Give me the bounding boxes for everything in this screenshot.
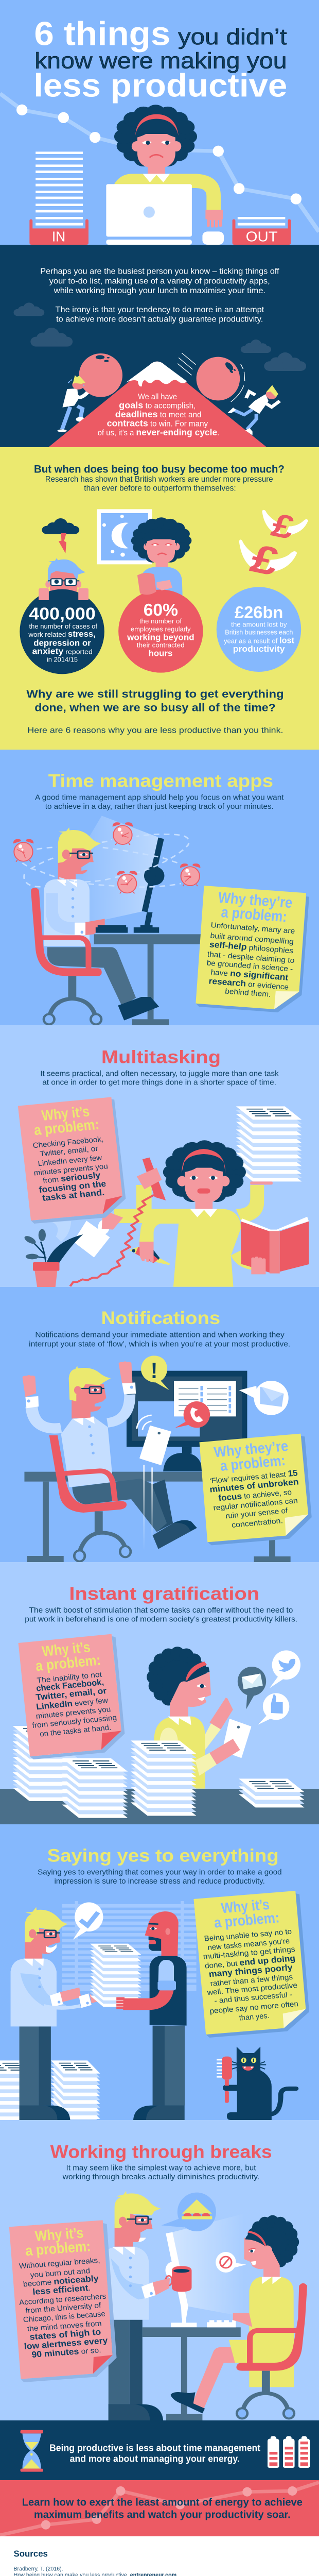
heading: why still struggling	[26, 688, 284, 714]
note: why it's a problem: than yes.	[239, 2011, 270, 2022]
illustration: mountain with text: of us, it’s a never-ending cycle.	[98, 428, 219, 438]
heading: Multitasking	[101, 1047, 221, 1067]
heading: Working through breaks	[50, 2142, 272, 2162]
intro text: Saying yes to everything that comes your way in order to make a good	[38, 1868, 282, 1876]
title: you didn’t	[178, 25, 287, 49]
note: why they're a problem: focus to achieve, so	[218, 1486, 292, 1503]
note: why it's a problem: Without regular breaks,	[19, 2256, 100, 2270]
stat: £26bn: year as a result of lost	[224, 635, 294, 645]
heading: Instant gratification	[69, 1584, 259, 1604]
illustration: woman at desk	[244, 2215, 299, 2387]
panel: working through breaks	[0, 2120, 319, 2420]
icon: coffee mug	[141, 2266, 191, 2299]
note: why they're a problem: be grounded in science -	[206, 959, 293, 973]
note: why it's a problem	[193, 1891, 309, 2038]
note: why it's a problem: focusing on the	[38, 1178, 107, 1195]
note: why it's a problem: people say no more often	[209, 1999, 299, 2015]
note: why it's a problem: you burn out and	[30, 2266, 91, 2279]
note: why they're a problem: self-help philosophies	[209, 939, 294, 955]
note: why it's a problem: the mind moves from	[27, 2319, 102, 2333]
illustration: stack handed over	[90, 1944, 141, 2007]
panel: hero	[0, 0, 319, 245]
stat: 60%	[118, 573, 203, 673]
intro text: your to-do list, making use of a variety of productivity apps,	[49, 276, 270, 285]
illustration: out tray	[233, 217, 291, 245]
intro text	[29, 1331, 290, 1348]
productivity line chart falling	[0, 94, 319, 232]
note: why it's a problem: become noticeably	[23, 2273, 99, 2289]
illustration: monitor side	[165, 2232, 197, 2327]
note: why they're a problem: Why they’re	[213, 1437, 289, 1461]
note: why it's a problem: Why it’s	[41, 1103, 91, 1124]
icon: like bubble	[258, 1693, 289, 1725]
stat: £26bn	[217, 587, 301, 672]
productivity line chart rising	[0, 2482, 319, 2535]
heading: Notifications	[101, 1308, 220, 1328]
illustration: in tray	[29, 151, 88, 245]
stat: 400,000: 400,000	[29, 604, 96, 623]
note: why it's a problem: - and thus successful -	[214, 1990, 293, 2005]
illustration: winged pound signs: £	[268, 506, 299, 546]
note: why they're a problem: ‘Flow’ requires at least 15	[209, 1468, 298, 1485]
icons: alarm clocks	[13, 822, 200, 893]
note: why it's a problem: check Facebook,	[36, 1677, 104, 1693]
illustration: man at desk	[31, 827, 201, 1026]
note: why it's a problem: many things poorly	[208, 1962, 293, 1979]
illustration: in tray: IN	[52, 228, 65, 245]
text: research intro	[45, 474, 273, 493]
intro text	[62, 2164, 259, 2181]
panel: instant gratification	[0, 1562, 319, 1824]
illustration: woman on phone	[147, 1647, 251, 1789]
note: why they're a problem: concentration.	[231, 1516, 283, 1530]
note: why they're a problem: regular notifications can	[213, 1496, 298, 1512]
stat: 60%: their contracted	[137, 642, 185, 649]
note: why it's a problem: from seriously	[42, 1170, 101, 1185]
icon: batteries charging	[268, 2436, 310, 2468]
illustration: juggling woman	[70, 1140, 273, 1287]
note: why it's a problem: from the University of	[25, 2301, 102, 2315]
intro text	[40, 266, 279, 324]
window blinds background	[62, 1901, 197, 1991]
stat: 400,000: work related stress,	[28, 629, 96, 639]
note: why it's a problem: Being unable to say no to	[204, 1927, 292, 1943]
monitor beam	[172, 2214, 244, 2317]
panel: saying yes to everything	[0, 1824, 319, 2136]
illustration: paper stack	[236, 1106, 302, 1181]
intro text	[40, 1070, 279, 1087]
dashed clock orbit	[22, 834, 189, 887]
illustration: man receiving paper	[11, 1907, 100, 2120]
stat: 400,000: in 2014/15	[47, 656, 78, 664]
intro text: impression is sure to increase stress and reduce productivity.	[55, 1877, 265, 1886]
icon: check bubble	[73, 1902, 103, 1940]
note: why they're a problem: built around compelling	[210, 931, 294, 946]
text: six reasons: Here are 6 reasons why you are less productive than you think.	[27, 725, 283, 735]
text: research intro: Research has shown that British workers are under more pressure	[45, 474, 273, 484]
note: why it's a problem: done, but end up doing	[204, 1953, 296, 1970]
intro text: The irony is that your tendency to do more in an attempt	[56, 304, 264, 314]
illustration: man with coffee	[108, 2191, 163, 2420]
stat: 60%: employees regularly	[131, 625, 191, 633]
intro text: Perhaps you are the busiest person you know – ticking things off	[40, 266, 279, 276]
illustration: tired woman and night window	[97, 509, 191, 596]
stat: 400,000: depression or	[33, 638, 91, 648]
intro text: A good time management app should help you focus on what you want	[35, 793, 284, 802]
illustration: paper stacks on desk	[62, 1740, 305, 1818]
clouds	[13, 302, 306, 371]
stat: 400,000: the number of cases of	[29, 623, 98, 631]
note: why it's a problem	[9, 2220, 117, 2382]
note: why they're a problem: behind them.	[225, 987, 271, 999]
stat: £26bn: productivity	[233, 644, 285, 654]
note: why it's a problem: Chicago, this is because	[23, 2310, 105, 2324]
illustration: floor paper stacks	[0, 2060, 100, 2136]
illustration: stressed woman at laptop	[106, 105, 224, 245]
heading: why still struggling: Why are we still struggling to get everything	[26, 688, 284, 700]
stat: 60%: the number of	[139, 618, 182, 625]
note: why it's a problem: 90 minutes or so.	[31, 2345, 101, 2360]
intro text: working through breaks actually diminishes productivity.	[62, 2173, 259, 2181]
illustration: paper stack behind note	[13, 1726, 78, 1801]
illustration: winged pound signs	[239, 506, 308, 584]
note: why it's a problem: a problem:	[213, 1909, 280, 1931]
panel: sources and credits	[0, 2536, 176, 2576]
note: why it's a problem: a problem:	[25, 2238, 92, 2259]
intro text: to achieve more doesn’t actually guarantee productivity.	[56, 314, 263, 324]
note: why they're a problem: that - despite claiming to	[207, 950, 295, 965]
heading: why still struggling: done, when we are so busy all of the time?	[34, 702, 276, 714]
icon: no-entry bubble	[216, 2252, 246, 2273]
text: energy message: Being productive is less about time management	[49, 2443, 260, 2453]
illustration: mountain with text: deadlines to meet and	[115, 410, 201, 420]
icon: mail bubble	[238, 1667, 266, 1709]
illustration: mountain with text: contracts to win. For many	[107, 418, 208, 429]
note: why it's a problem: minutes prevents you	[36, 1705, 111, 1721]
intro text: It may seem like the simplest way to achieve more, but	[66, 2164, 256, 2172]
panel: energy message band	[0, 2420, 319, 2480]
intro text: while working through your lunch to maximise your time.	[54, 285, 265, 295]
note: why they're a problem: have no significant	[210, 967, 289, 982]
note: why it's a problem: well. The most productive	[206, 1981, 298, 1997]
note: why it's a problem: According to researchers	[19, 2292, 107, 2307]
note: why it's a problem	[19, 1634, 125, 1759]
note: why it's a problem: a problem:	[34, 1652, 102, 1674]
note: why they're a problem: ruin your sense of	[225, 1506, 289, 1520]
illustration: mountain with text	[48, 362, 267, 447]
icon: call bubble	[175, 1401, 210, 1428]
icon: mail bubble	[239, 1381, 289, 1415]
icon: hourglass	[21, 2430, 43, 2472]
note: why it's a problem: new tasks means you’re	[207, 1937, 290, 1952]
note: why it's a problem: LinkedIn every few	[38, 1154, 102, 1168]
illustration: mountain with text: goals to accomplish,	[119, 400, 196, 411]
note: why they're a problem: Why they’re	[217, 889, 293, 911]
note: why it's a problem: minutes prevents you	[33, 1162, 109, 1177]
illustration: open book	[241, 1217, 309, 1274]
note: why they're a problem: Unfortunately, many are	[210, 921, 295, 936]
note: why they're a problem: a problem:	[219, 1452, 286, 1474]
panel: intro navy	[0, 245, 319, 447]
illustration: spilled mug and plant	[23, 1210, 123, 1287]
note: why they're a problem	[200, 1434, 312, 1545]
illustration: man and desk	[22, 1361, 291, 1563]
note: why it's a problem: rather than a few things	[210, 1973, 293, 1988]
icon: alert bubble: !	[151, 1359, 157, 1383]
note: why they're a problem: a problem:	[220, 904, 288, 925]
intro text: Notifications demand your immediate attention and when working they	[35, 1331, 285, 1339]
note: why they're a problem: minutes of unbroken	[209, 1477, 299, 1494]
source list	[13, 2565, 269, 2576]
note: why it's a problem: Twitter, email, or	[40, 1144, 99, 1158]
icon: twitter bubble	[270, 1650, 300, 1688]
illustration: bald man handing work	[116, 1911, 187, 2120]
title: less productive	[33, 67, 287, 104]
illustration: mountain with text: We all have	[138, 392, 177, 401]
note: why it's a problem: Why it’s	[41, 1639, 91, 1659]
illustration: winged pound signs: £	[246, 536, 284, 584]
illustration: desk, keyboard and chair	[143, 2283, 307, 2420]
heading: Saying yes to everything	[47, 1845, 279, 1866]
note: why it's a problem: Checking Facebook,	[32, 1135, 104, 1150]
illustration: black cat with brush	[217, 2047, 296, 2120]
intro text	[25, 1606, 297, 1623]
intro text	[35, 793, 284, 811]
heading: Time management apps	[48, 771, 273, 791]
note: why it's a problem: Why it’s	[220, 1896, 270, 1917]
illustration: monitor	[142, 838, 164, 927]
text: energy message	[49, 2443, 260, 2464]
stat: £26bn: £26bn	[235, 603, 283, 622]
note: why it's a problem: multi-tasking to get things	[203, 1945, 295, 1961]
intro text: at once in order to get more things done in a shorter space of time.	[42, 1078, 276, 1087]
note: why it's a problem: LinkedIn every few	[36, 1695, 109, 1711]
title	[33, 15, 287, 104]
panel: call to action band	[0, 2480, 319, 2536]
note: why it's a problem: on the tasks at hand.	[39, 1723, 112, 1738]
stat: 60%: working beyond	[127, 632, 194, 642]
note: why it's a problem	[18, 1097, 126, 1224]
note: why it's a problem: states of high to	[29, 2327, 101, 2342]
note: why it's a problem: Twitter, email, or	[35, 1685, 107, 1702]
illustration: boulder rolling down and man running	[178, 353, 280, 435]
illustration: man pushing boulder	[58, 353, 122, 432]
heading: sources: Sources	[13, 2549, 48, 2559]
illustration: sandwich bubble	[162, 2193, 216, 2231]
note: why it's a problem: less efficient.	[32, 2282, 91, 2297]
illustration: storm cloud and worried man	[42, 518, 85, 592]
illustration: monitor beam	[61, 816, 158, 924]
illustration: cuff over stack	[44, 1993, 92, 2008]
illustration: computer screen	[127, 1371, 247, 1471]
note: why it's a problem: tasks at hand.	[42, 1187, 105, 1203]
note: why they're a problem	[196, 886, 309, 1012]
stat: 400,000: anxiety reported	[32, 646, 93, 656]
panel: notifications	[0, 1287, 319, 1563]
panel: time management apps	[0, 750, 319, 1026]
note: why it's a problem: Why it’s	[34, 2225, 84, 2244]
stat: 60%: hours	[149, 648, 172, 658]
panel: multitasking	[0, 1025, 319, 1287]
note: why it's a problem: The inability to not	[37, 1670, 102, 1685]
text: call to action	[22, 2496, 303, 2520]
note: why it's a problem: low alertness every	[24, 2335, 109, 2351]
illustration: out tray: OUT	[246, 228, 278, 245]
intro text	[38, 1868, 282, 1886]
note: why it's a problem: from seriously focussing	[32, 1714, 117, 1730]
stat: £26bn: the amount lost by	[231, 621, 287, 629]
icon: vibrating phone	[137, 1415, 170, 1551]
intro text: It seems practical, and often necessary, to juggle more than one task	[40, 1070, 279, 1078]
intro text: to achieve in a day, rather than just keeping track of your minutes.	[45, 802, 274, 811]
text: research intro: than ever before to outperform themselves:	[84, 484, 236, 493]
text: energy message: and more about managing your energy.	[70, 2453, 240, 2464]
panel: yellow statistics	[0, 447, 319, 750]
intro text: interrupt your state of ‘flow’, which is when you’re at your most productive.	[29, 1340, 290, 1348]
stat: £26bn: British businesses each	[225, 629, 293, 636]
stat: 60%: 60%	[144, 600, 178, 619]
note: why it's a problem: a problem:	[33, 1116, 100, 1139]
title: 6 things	[34, 15, 170, 53]
note: why they're a problem: research or evidence	[208, 976, 289, 991]
source list: Bradberry, T. (2016).	[13, 2565, 63, 2572]
stat: 400,000	[20, 588, 104, 674]
title: know were making you	[34, 48, 287, 74]
icon: alert bubble	[141, 1355, 169, 1390]
